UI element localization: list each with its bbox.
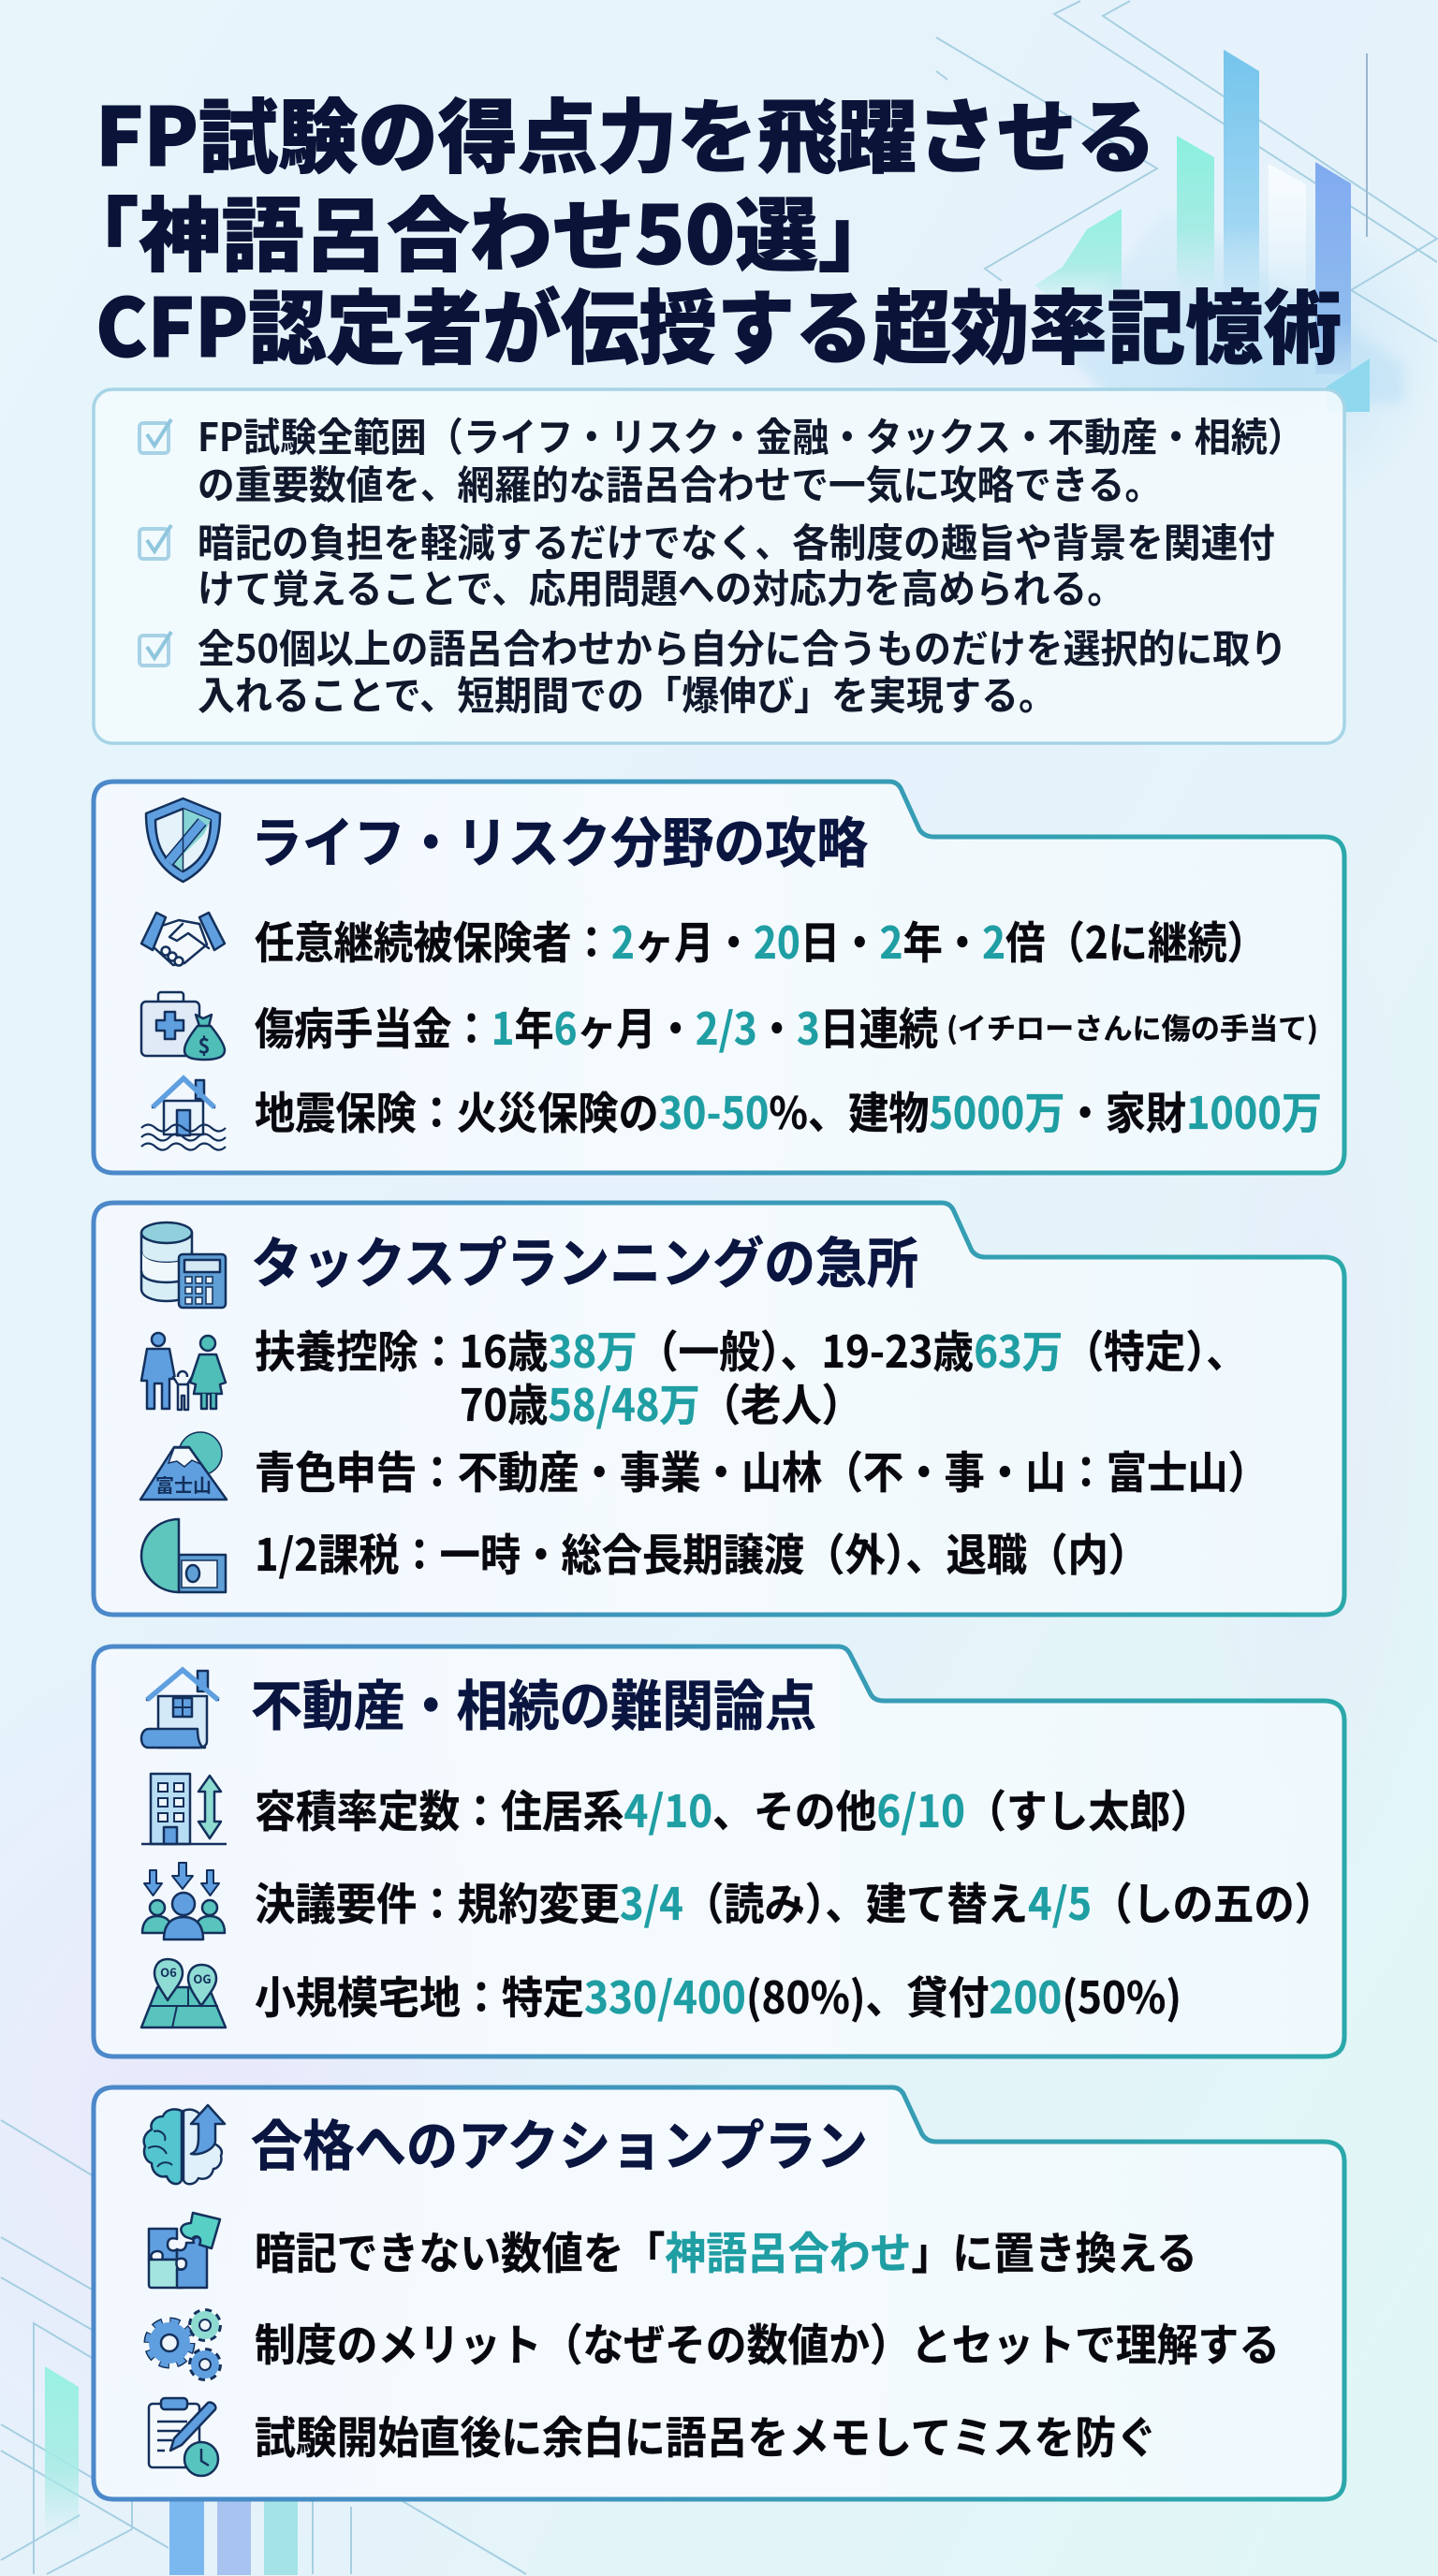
title xyxy=(56,72,1342,380)
text: row 2: 青色申告：不動産・事業・山林（不・事・山：富士山） xyxy=(255,1437,1269,1501)
icon: house on a scroll xyxy=(141,1670,218,1748)
icon: building and arrow xyxy=(141,1774,227,1844)
text: row 1: 扶養控除：16歳38万（一般）、19-23歳63万（特定）、 xyxy=(255,1316,1247,1381)
icon: family xyxy=(141,1333,226,1410)
text: row 3: 地震保険：火災保険の30-50%、建物5000万・家財1000万 xyxy=(255,1077,1322,1142)
text: summary 1: FP試験全範囲（ライフ・リスク・金融・タックス・不動産・相続） xyxy=(198,406,1304,463)
text: row 2: 決議要件：規約変更3/4（読み）、建て替え4/5（しの五の） xyxy=(255,1868,1335,1933)
icon: clipboard, pencil and clock xyxy=(149,2398,218,2476)
heading: tax planning: タックスプランニングの急所 xyxy=(251,1220,918,1298)
text: row 1: 暗記できない数値を「神語呂合わせ」に置き換える xyxy=(255,2217,1197,2282)
icon: gears xyxy=(149,2312,218,2378)
text: summary 2: 暗記の負担を軽減するだけでなく、各制度の趣旨や背景を関連付 xyxy=(198,512,1275,569)
text: summary 3: 全50個以上の語呂合わせから自分に合うものだけを選択的に取り xyxy=(198,618,1287,675)
icon: map with pins: OG xyxy=(193,1969,212,1987)
icon: house in flood xyxy=(141,1078,226,1149)
icon: mount fuji: 富士山 xyxy=(155,1471,212,1498)
text: row 2 note: (イチローさんに傷の手当て) xyxy=(946,1005,1318,1047)
text: row 2: 制度のメリット（なぜその数値か）とセットで理解する xyxy=(255,2309,1280,2374)
icon: half pie and banknote xyxy=(141,1519,226,1592)
title: 「神語呂合わせ50選」 xyxy=(56,170,901,287)
icon: people and arrows xyxy=(142,1863,225,1939)
icon: mount fuji xyxy=(140,1432,227,1500)
heading: real estate and inheritance: 不動産・相続の難関論点 xyxy=(251,1662,816,1741)
icon: puzzle xyxy=(149,2213,220,2288)
icon: first aid kit and money bag xyxy=(141,992,225,1060)
icon: checkbox 1 xyxy=(139,419,171,453)
text: summary 3 xyxy=(198,618,1287,722)
text: summary 2 xyxy=(198,512,1275,615)
panel: summary xyxy=(94,389,1344,743)
icon: first aid kit and money bag: $ xyxy=(198,1030,210,1060)
text: row 3: 1/2課税：一時・総合長期譲渡（外）、退職（内） xyxy=(255,1519,1149,1584)
text: row 1 continued: 70歳58/48万（老人） xyxy=(460,1369,862,1434)
panel: real estate and inheritance xyxy=(94,1647,1344,2056)
panel: tax planning xyxy=(94,1203,1344,1615)
icon: shield xyxy=(146,798,220,882)
heading: action plan: 合格へのアクションプラン xyxy=(251,2102,868,2181)
panel: life and risk xyxy=(94,782,1344,1173)
title: CFP認定者が伝授する超効率記憶術 xyxy=(95,263,1342,380)
text: row 3: 小規模宅地：特定330/400(80%)、貸付200(50%) xyxy=(255,1962,1181,2027)
icon: checkbox 3 xyxy=(139,632,171,666)
text: row 1: 容積率定数：住居系4/10、その他6/10（すし太郎） xyxy=(255,1776,1211,1840)
icon: brain and arrow xyxy=(144,2105,225,2184)
icon: handshake xyxy=(141,913,225,966)
text: summary 1 xyxy=(198,406,1304,511)
text: row 1: 任意継続被保険者：2ヶ月・20日・2年・2倍（2に継続） xyxy=(255,907,1267,972)
text: row 2: 傷病手当金：1年6ヶ月・2/3・3日連続 xyxy=(255,993,938,1058)
icon: map with pins: O6 xyxy=(160,1963,177,1981)
heading: life and risk: ライフ・リスク分野の攻略 xyxy=(251,799,868,878)
title: FP試験の得点力を飛躍させる xyxy=(95,72,1156,189)
text: summary 3: 入れることで、短期間での「爆伸び」を実現する。 xyxy=(198,665,1056,722)
text: row 3: 試験開始直後に余白に語呂をメモしてミスを防ぐ xyxy=(255,2402,1157,2466)
text: summary 2: けて覚えることで、応用問題への対応力を高められる。 xyxy=(198,558,1124,615)
panel: action plan xyxy=(94,2087,1344,2499)
icon: database and calculator xyxy=(141,1222,226,1308)
icon: checkbox 2 xyxy=(139,525,171,559)
text: summary 1: の重要数値を、網羅的な語呂合わせで一気に攻略できる。 xyxy=(198,454,1162,511)
icon: map with pins xyxy=(141,1959,226,2027)
